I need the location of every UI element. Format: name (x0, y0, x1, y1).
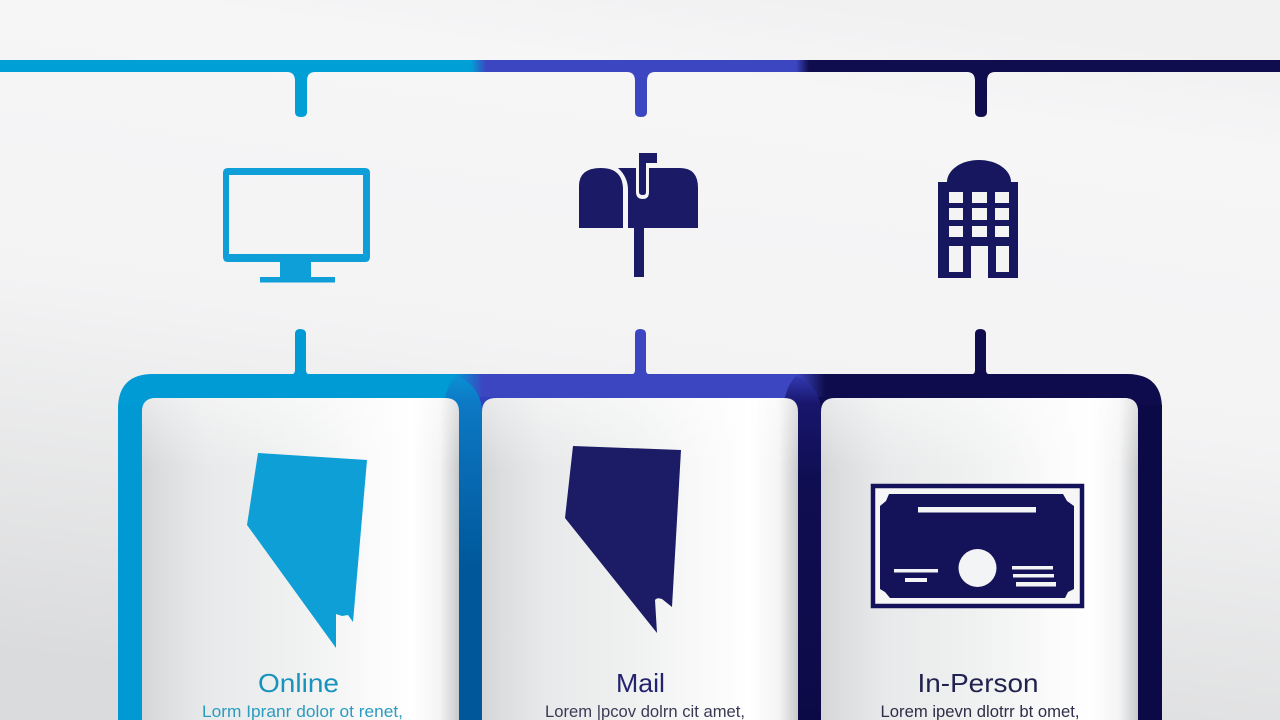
connector: in-person bottom (973, 329, 988, 374)
icon: mailbox (579, 153, 698, 277)
panel: in-person (821, 398, 1138, 720)
heading: mail: Mail (616, 668, 665, 698)
connector: mail bottom (633, 329, 648, 374)
heading: online: Online (258, 668, 339, 698)
heading: in-person: In-Person (918, 668, 1038, 698)
icon: government building (938, 160, 1018, 278)
connector: online top (287, 72, 315, 117)
connector: in-person top (967, 72, 995, 117)
icon: computer monitor (223, 168, 370, 282)
top connector bar (0, 60, 1280, 117)
connector: online bottom (293, 329, 308, 374)
panel: mail (482, 398, 798, 720)
card frame with connectors (118, 329, 1162, 720)
icon: certificate (873, 486, 1082, 606)
panel: online (142, 398, 459, 720)
connector: mail top (627, 72, 655, 117)
icon: Nevada state shape, online (247, 453, 367, 648)
icon: Nevada state shape, mail (565, 446, 681, 633)
